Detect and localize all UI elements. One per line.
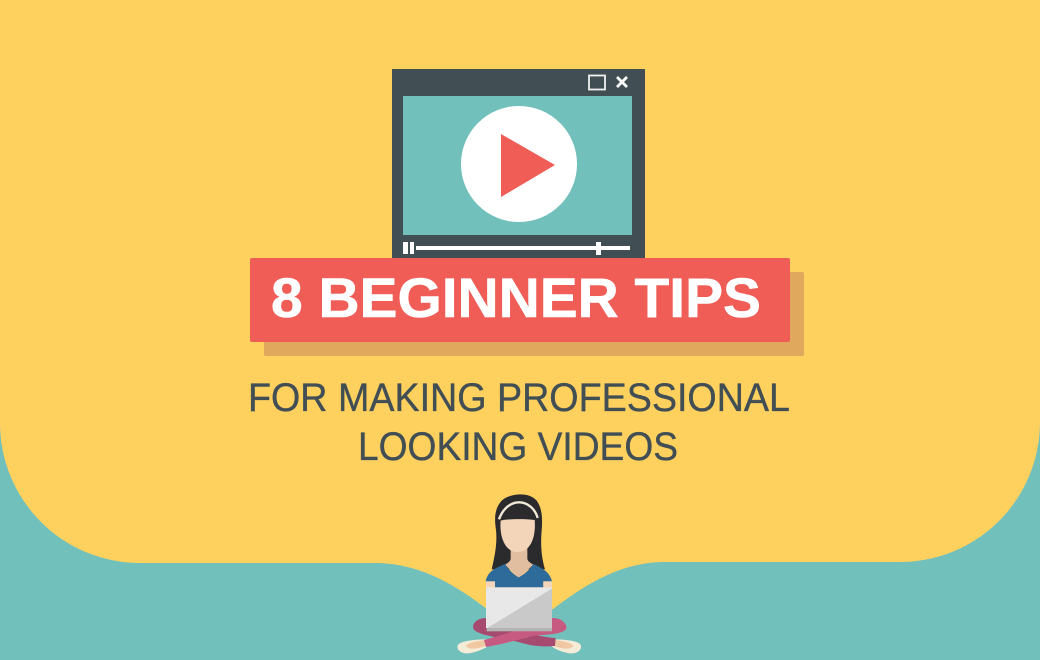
progress bar [416, 246, 630, 250]
banner [250, 258, 790, 342]
player frame [392, 69, 645, 259]
left foot [457, 639, 487, 653]
player screen [403, 96, 632, 235]
play button circle [461, 106, 577, 222]
progress knob [596, 242, 601, 255]
laptop lid [486, 587, 552, 628]
close icon [617, 77, 627, 87]
left foot skin [466, 640, 487, 649]
title: 8 BEGINNER TIPS [271, 266, 761, 329]
laptop base [487, 628, 552, 631]
subtitle line 1: FOR MAKING PROFESSIONAL [248, 376, 790, 420]
play triangle [501, 134, 555, 197]
arms [486, 581, 552, 587]
video player icon [392, 69, 645, 259]
illustration: woman with laptop [457, 494, 581, 653]
neck and chest [505, 548, 533, 579]
maximize icon [589, 76, 605, 90]
pause icon [403, 242, 414, 254]
subtitle line 2: LOOKING VIDEOS [358, 425, 678, 469]
right foot skin [553, 640, 573, 649]
right foot [552, 639, 581, 653]
banner shadow [264, 272, 804, 356]
face [500, 519, 535, 552]
hair [492, 494, 545, 569]
front leg [484, 618, 566, 647]
laptop lid shade [487, 589, 552, 628]
headband [499, 502, 538, 519]
torso [486, 564, 552, 587]
back leg [473, 618, 556, 646]
